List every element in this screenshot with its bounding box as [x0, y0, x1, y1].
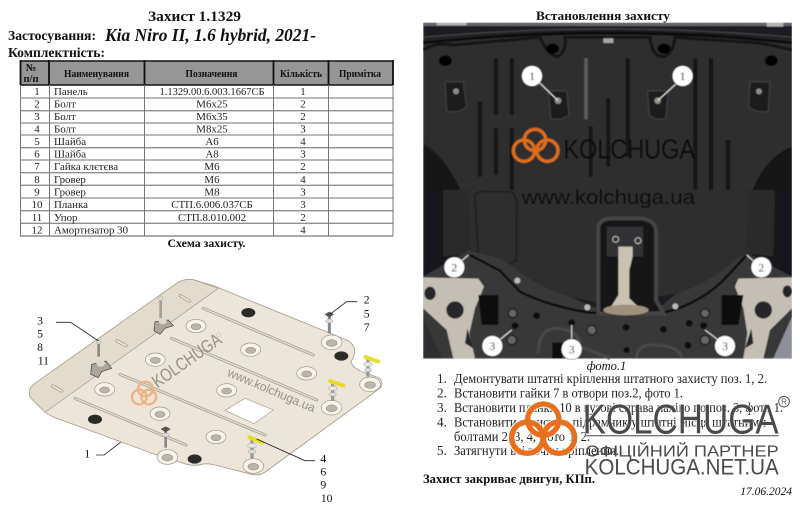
wheel arch shadows: [423, 147, 792, 277]
table rows: Шайба: [54, 148, 86, 160]
photo watermark logo: www.kolchuga.ua: [521, 186, 696, 209]
photo 1: [423, 23, 792, 360]
table rows: 1: [300, 86, 306, 98]
installation steps: 5.: [437, 443, 447, 458]
registered mark: R: [781, 398, 787, 407]
table rows: Болт: [54, 98, 76, 110]
protection plate diagram: [29, 279, 382, 505]
parts table: [20, 60, 393, 236]
leader lines: [455, 82, 760, 347]
installation steps: Встановити гайки 7 в отвори поз.2, фото 1.: [454, 386, 683, 400]
table rows: 3: [300, 199, 306, 211]
table rows: 8: [34, 174, 40, 186]
callout 3 right: 3: [722, 340, 728, 353]
date: 17.06.2024: [740, 486, 792, 498]
side brackets on panel: [443, 190, 470, 257]
recessed front edge: [423, 37, 792, 57]
table rows: М8: [204, 186, 220, 198]
subframe ribs: [538, 328, 682, 358]
subframe bolts: [507, 309, 710, 345]
installation steps: [437, 371, 783, 458]
callout numbers: 2: [364, 294, 370, 307]
installation steps: Затягнути всі точки кріплення.: [454, 443, 619, 458]
table rows: М6х35: [196, 111, 228, 123]
mounting bosses: [445, 82, 770, 119]
table header: №: [26, 63, 36, 74]
registered mark: [779, 396, 789, 407]
table rows: 10: [32, 199, 43, 211]
photo background: [423, 23, 792, 358]
table rows: Упор: [54, 212, 78, 224]
installation steps: Встановити планки 10 в кузові справа наліво по поз. 3, фото 1.: [454, 400, 783, 415]
partner tagline: ОФІЦІЙНИЙ ПАРТНЕР: [585, 442, 779, 461]
callout 3 right: [715, 336, 735, 356]
table rows: Гровер: [54, 186, 86, 198]
bent front flange: [29, 279, 218, 412]
callout numbers: 10: [321, 492, 333, 505]
panel slots: [480, 58, 728, 190]
Kolchuga partner logo: [512, 396, 789, 480]
watermark logo: www.kolchuga.ua: [225, 365, 318, 415]
callout numbers: 6: [320, 466, 326, 479]
photo watermark logo: KOLCHUGA: [563, 133, 695, 164]
table rows: М6: [204, 174, 220, 186]
table rows: Болт: [54, 111, 76, 123]
table rows: Шайба: [54, 136, 86, 148]
callout numbers: 11: [38, 355, 49, 368]
table rows: Амортизатор 30: [54, 224, 129, 236]
table header: Наименування: [64, 69, 129, 80]
table header: Примітка: [339, 69, 382, 80]
control arms: [423, 277, 792, 358]
engine mount recess: [598, 218, 663, 315]
table rows: [32, 86, 306, 236]
table rows: Панель: [54, 86, 88, 98]
application heading: [8, 25, 316, 45]
pale panel bolts: [514, 278, 678, 310]
brackets and bolts: [91, 296, 173, 378]
square opening: [225, 398, 273, 424]
watermark logo: KOLCHUGA: [148, 329, 225, 392]
callout numbers: 7: [364, 321, 370, 334]
table rows: СТП.8.010.002: [178, 212, 246, 224]
callout numbers: 3: [37, 315, 43, 328]
table rows: 11: [32, 212, 42, 224]
partner url: KOLCHUGA.NET.UA: [585, 455, 779, 480]
table header: Позначення: [186, 69, 238, 80]
table header: [20, 60, 393, 86]
boss bolts: [453, 88, 762, 104]
front arc: [423, 33, 792, 43]
table rows: 12: [32, 224, 42, 236]
table rows: 4: [300, 136, 306, 148]
table rows: 3: [300, 148, 306, 160]
subframe: [423, 250, 792, 358]
callout 1 left: [522, 66, 542, 86]
callout numbers: 1: [84, 448, 90, 461]
table rows: 3: [300, 186, 306, 198]
table rows: М6х25: [196, 98, 228, 110]
table rows: 7: [34, 161, 40, 173]
watermark logo: [132, 329, 318, 415]
callout numbers: 8: [37, 341, 43, 354]
application heading: Kia Niro II, 1.6 hybrid, 2021-: [104, 25, 316, 45]
callout numbers: 5: [37, 328, 43, 341]
table rows: М6: [204, 161, 220, 173]
installation steps: болтами 2, 3, 4, фото 1, 2.: [454, 429, 590, 444]
table rows: Гайка клєтєва: [54, 161, 118, 173]
callout 2 right: [751, 257, 772, 278]
callout numbers: [37, 294, 370, 505]
embossed hatch: [475, 191, 517, 263]
table rows: 3: [300, 124, 306, 136]
fastener stacks: [161, 312, 372, 458]
callout numbers: 5: [364, 308, 370, 321]
scheme caption: Схема захисту.: [168, 236, 246, 250]
logo rings: [512, 404, 575, 453]
table header: Кількість: [280, 69, 322, 80]
title: Захист 1.1329: [148, 9, 241, 25]
arm cut-outs: [423, 285, 792, 358]
callout 1 right: 1: [680, 70, 686, 83]
completeness heading: Комплектність:: [8, 45, 105, 60]
installation steps: 2.: [437, 386, 447, 400]
plate body: [29, 279, 382, 475]
table rows: 4: [300, 224, 306, 236]
table rows: 5: [34, 136, 40, 148]
callout 1 right: [672, 66, 693, 86]
callout 2 left: [444, 257, 465, 278]
top edge: [423, 23, 792, 26]
table rows: 9: [34, 186, 40, 198]
installation steps: 1.: [437, 371, 447, 386]
table rows: 4: [300, 174, 306, 186]
underbody panel: [423, 32, 792, 303]
installation steps: Демонтувати штатні кріплення штатного захисту поз. 1, 2.: [454, 371, 767, 386]
table rows: А6: [205, 136, 219, 148]
callout 2 right: 2: [758, 261, 764, 274]
table rows: Планка: [54, 199, 88, 211]
table rows: 2: [300, 161, 306, 173]
callout 3 middle: [561, 339, 582, 360]
stiffening ribs: [75, 308, 317, 445]
callout numbers: 4: [320, 452, 326, 465]
drain holes: [88, 308, 348, 464]
front mount holes: [439, 44, 778, 66]
callout 3 left: 3: [489, 340, 495, 353]
photo watermark logo: [513, 129, 696, 209]
leader lines: [56, 302, 357, 461]
callout 1 left: 1: [529, 70, 535, 83]
table rows: Гровер: [54, 174, 86, 186]
flange slots: [53, 296, 189, 391]
panel edge seam: [470, 255, 747, 313]
table rows: 1: [34, 86, 40, 98]
table rows: СТП.6.006.037СБ: [171, 199, 253, 211]
mounting dimples: [95, 319, 380, 473]
table rows: 6: [34, 148, 40, 160]
table rows: Болт: [54, 124, 76, 136]
installation steps: Встановити захист на підрамник у штатні місця штатними: [454, 414, 766, 430]
table rows: 2: [300, 212, 306, 224]
table rows: М8х25: [196, 124, 228, 136]
callout 3 left: [482, 336, 503, 356]
installation steps: 4.: [437, 414, 447, 430]
yellow plates: [249, 357, 378, 442]
subframe holes: [512, 312, 707, 358]
table rows: 1.1329.00.6.003.1667СБ: [160, 86, 264, 98]
table rows: 4: [34, 124, 40, 136]
application heading: Застосування:: [8, 28, 96, 43]
table rows: 2: [300, 111, 306, 123]
table rows: 3: [34, 111, 40, 123]
callout 3 middle: 3: [569, 343, 575, 356]
install heading: Встановлення захисту: [536, 8, 671, 23]
photo caption: фото.1: [587, 359, 626, 373]
callout 2 left: 2: [451, 261, 457, 274]
installation steps: 3.: [437, 400, 447, 415]
table rows: 2: [300, 98, 306, 110]
table rows: А8: [205, 148, 219, 160]
callout numbers: 9: [320, 479, 326, 492]
table rows: 2: [34, 98, 40, 110]
closing note: Захист закриває двигун, КПп.: [423, 472, 595, 486]
table header: п/п: [23, 74, 39, 85]
